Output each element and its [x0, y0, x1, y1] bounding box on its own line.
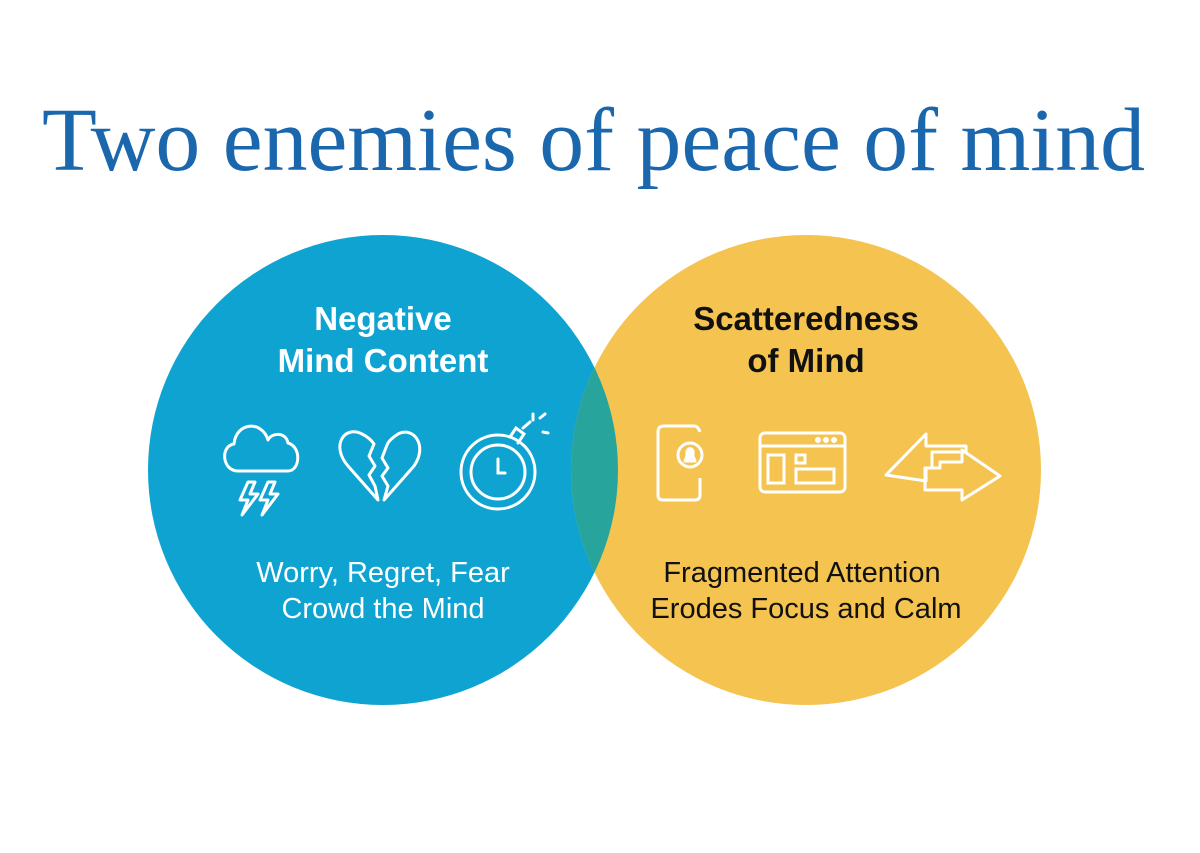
icon: browser window — [760, 433, 845, 492]
heading: negative mind content: Negative — [314, 300, 452, 337]
icon: broken heart — [340, 432, 420, 500]
overlap lens — [571, 368, 618, 572]
heading: scatteredness of mind: of Mind — [747, 342, 865, 379]
panel: scatteredness circle — [571, 235, 1041, 705]
icon: storm cloud — [225, 426, 298, 515]
icon: ticking bomb clock — [461, 414, 548, 509]
text: right caption: Erodes Focus and Calm — [650, 593, 962, 625]
heading: scatteredness of mind: Scatteredness — [693, 300, 919, 337]
icon: switching arrows — [886, 434, 1000, 500]
panel: negative mind content circle — [148, 235, 618, 705]
text: left caption: Worry, Regret, Fear — [256, 557, 510, 589]
title: Two enemies of peace of mind — [42, 91, 1145, 190]
text: right caption: Fragmented Attention — [663, 557, 941, 589]
heading: negative mind content: Mind Content — [278, 342, 488, 379]
icon: phone notification — [658, 426, 702, 500]
text: left caption: Crowd the Mind — [281, 593, 485, 625]
